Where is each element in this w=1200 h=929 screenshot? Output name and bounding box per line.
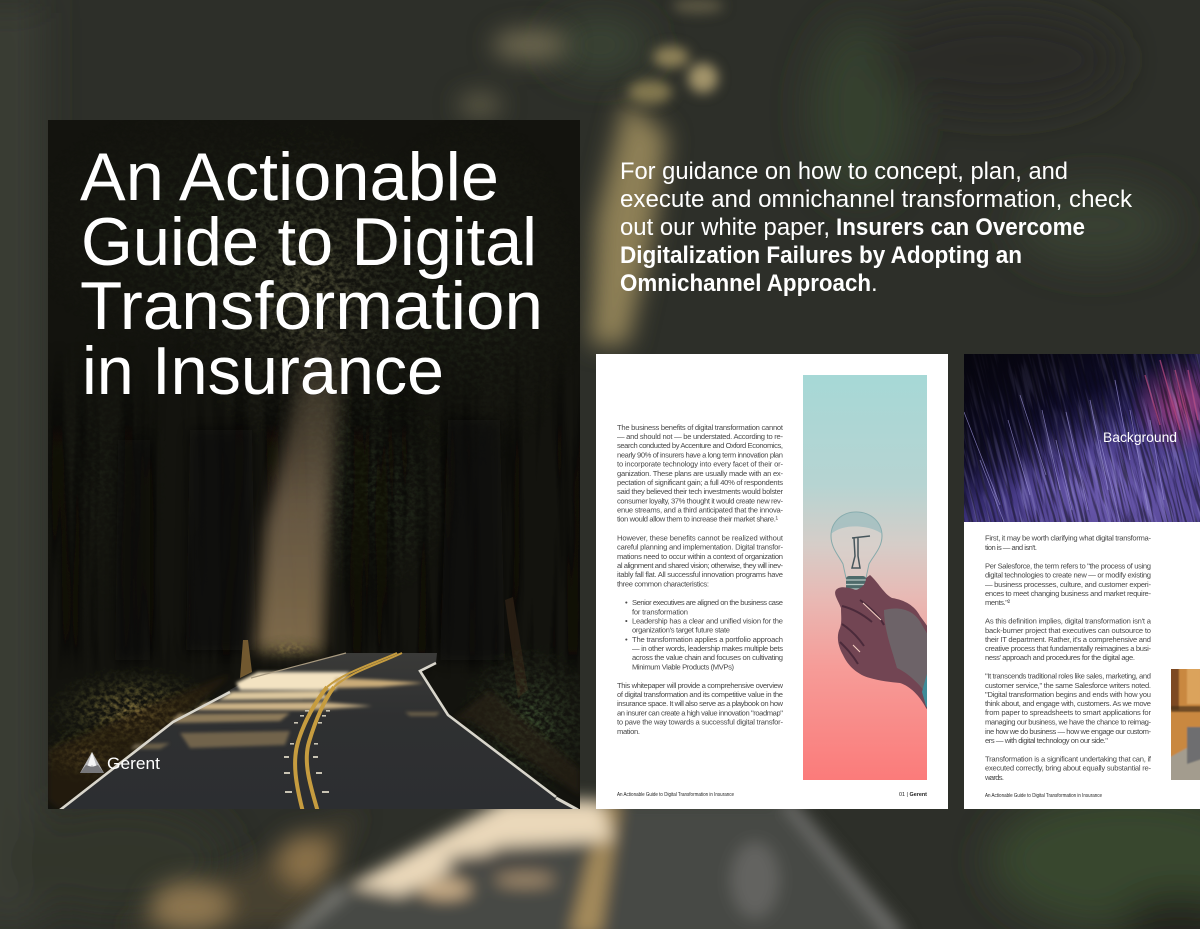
page 02 body copy: ers — with digital technology on our side." [985, 736, 1108, 745]
page 01 body copy: an insurer can create a high value innovation "roadmap" [617, 708, 783, 718]
page 01 body copy: for transformation [632, 608, 688, 616]
sun patches [130, 672, 440, 749]
road edge lines [60, 653, 578, 810]
call-to-action paragraph: execute and omnichannel transformation, check [620, 186, 1133, 213]
page 01 body copy: itably fall flat. All successful innovation programs have [617, 570, 783, 579]
image: hand holding light bulb [803, 375, 934, 780]
page 02 body copy: think about, and engage with, customers. As we move [985, 699, 1151, 708]
page 02 body copy: their IT department. Rather, it's a comprehensive and [985, 635, 1151, 644]
page 01 body copy: ganization. These plans are usually made with an ex- [617, 469, 783, 478]
page 02 body copy: Transformation is a significant undertaking that can, if [985, 754, 1152, 764]
page 01 body copy: mation. [617, 727, 640, 736]
title: An Actionable [80, 139, 499, 215]
double yellow lines [295, 653, 402, 812]
page 02 body copy: digital technologies to create new — or modify existing [985, 570, 1151, 580]
page 01 body copy: insurance space. It will also serve as a playbook on how [617, 699, 784, 708]
page 01 body copy: — and should not — be understated. According to re- [617, 432, 783, 441]
title: Transformation [80, 268, 543, 344]
page 01 body copy: The transformation applies a portfolio approach [632, 635, 783, 644]
call-to-action paragraph: For guidance on how to concept, plan, and [620, 158, 1068, 185]
call-to-action paragraph: Omnichannel Approach [620, 270, 871, 297]
light bulb [831, 512, 882, 595]
page 01 body copy: al alignment and shared vision; otherwise, they will inev- [617, 561, 783, 570]
page 01 footer: 01 | Gerent [899, 792, 927, 798]
page 01 footer [617, 792, 927, 798]
page 02 body copy: from paper to spreadsheets to smart applications for [985, 708, 1151, 717]
hand [835, 575, 927, 710]
page 02 body copy: tion is — and isn't. [985, 543, 1037, 552]
call-to-action paragraph [620, 158, 1133, 297]
page 02 body copy: back-burner project that executives can outsource to [985, 626, 1151, 635]
page 01 body copy: The business benefits of digital transformation cannot [617, 423, 784, 432]
page 01 body copy: This whitepaper will provide a comprehensive overview [617, 681, 784, 690]
title: Guide to Digital [81, 204, 537, 280]
page 01 body copy: to pave the way towards a successful digital transfor- [617, 718, 783, 726]
page 02: background section [964, 354, 1200, 809]
page 01: white paper intro [596, 354, 948, 809]
page 01 body copy: said they believed their tech investments would bolster [617, 487, 783, 496]
page 01 body copy: • [625, 616, 628, 626]
call-to-action paragraph: out our white paper, [620, 214, 830, 241]
road [58, 653, 578, 812]
page 01 body copy: • [625, 635, 628, 644]
page 02 body copy: Per Salesforce, the term refers to "the process of using [985, 562, 1151, 570]
image: office interior [1171, 669, 1200, 780]
light beam [240, 328, 528, 698]
page 01 body copy: Minimum Viable Products (MVPs) [632, 662, 734, 672]
title: in Insurance [82, 333, 444, 409]
page 01 body copy: of digital transformation and its competitive value in the [617, 690, 783, 699]
page 01 body copy: Senior executives are aligned on the business case [632, 598, 783, 607]
page 02 body copy: managing our business, we have the chance to reimag- [985, 718, 1151, 726]
page 01 body copy: across the value chain and focuses on cultivating [632, 653, 783, 662]
cover: forest road photo [48, 120, 580, 809]
call-to-action paragraph: Insurers can Overcome [836, 214, 1085, 241]
page 01 body copy: consumer loyalty, 37% thought it would create new rev- [617, 496, 783, 506]
page 01 body copy: to incorporate technology into every facet of their or- [617, 460, 783, 468]
tree trunks [51, 396, 580, 664]
page 01 body copy: three common characteristics: [617, 580, 709, 588]
call-to-action paragraph: Digitalization Failures by Adopting an [620, 242, 1022, 269]
title [80, 151, 538, 395]
page 01 body copy: mations need to occur within a context of organization [617, 552, 783, 561]
page 01 body copy: However, these benefits cannot be realized without [617, 534, 784, 542]
page 01 body copy: tion would allow them to increase their market share.¹ [617, 514, 778, 524]
page 02 body copy: — business processes, culture, and customer experi- [985, 580, 1151, 589]
page 02 body copy: First, it may be worth clarifying what digital transforma- [985, 534, 1151, 542]
page 01 body copy [617, 423, 784, 736]
page 02 body copy: "Digital transformation begins and ends with how you [985, 690, 1151, 699]
page 01 body copy: organization's target future state [632, 626, 730, 634]
page 02 body copy: creative process that fundamentally reimagines a busi- [985, 644, 1151, 653]
page 01 body copy: pectation of significant gain; a full 40% of respondents [617, 478, 783, 487]
page 01 body copy: — in other words, leadership makes multiple bets [632, 644, 783, 653]
page 01 body copy: search conducted by Accenture and Oxford Economics, [617, 441, 783, 450]
logo: Gerent: Gerent [107, 754, 160, 773]
page 02 body copy: ness' approach and procedures for the digital age. [985, 653, 1135, 662]
image: purple fibre optics [964, 354, 1200, 522]
page 02 body copy: wards. [984, 773, 1004, 782]
forest canopy glow [100, 150, 528, 556]
page 02 body copy: ences to meet changing business and market require- [985, 589, 1151, 598]
road reflectors [284, 710, 330, 793]
page 02 heading: Background [1103, 429, 1177, 445]
page 01 body copy: Leadership has a clear and unified vision for the [632, 616, 783, 626]
page 02 body copy: "It transcends traditional roles like sales, marketing, and [985, 672, 1151, 680]
undergrowth [30, 634, 605, 810]
page 01 body copy: enue streams, and a third anticipated that the innova- [617, 506, 783, 514]
page 02 body copy: ments."² [985, 598, 1010, 607]
blurred road [270, 800, 910, 929]
page 02 body copy: ine how we do business — how we engage our custom- [985, 727, 1151, 736]
page 02 body copy [984, 534, 1152, 782]
page 02 body copy: executed correctly, bring about equally substantial re- [985, 764, 1151, 772]
page 01 body copy: careful planning and implementation. Digital transfor- [617, 542, 783, 552]
page 01 body copy: nearly 90% of insurers have a long term innovation plan [617, 450, 783, 460]
page 02 footer: An Actionable Guide to Digital Transformation in Insurance [985, 793, 1102, 799]
logo: Gerent [80, 752, 160, 773]
page 01 footer: An Actionable Guide to Digital Transformation in Insurance [617, 792, 734, 798]
call-to-action paragraph: . [871, 270, 878, 297]
page 01 body copy: • [625, 598, 628, 607]
page 02 body copy: customer service," the same Salesforce writers noted. [985, 681, 1151, 690]
page 02 body copy: As this definition implies, digital transformation isn't a [985, 616, 1152, 626]
